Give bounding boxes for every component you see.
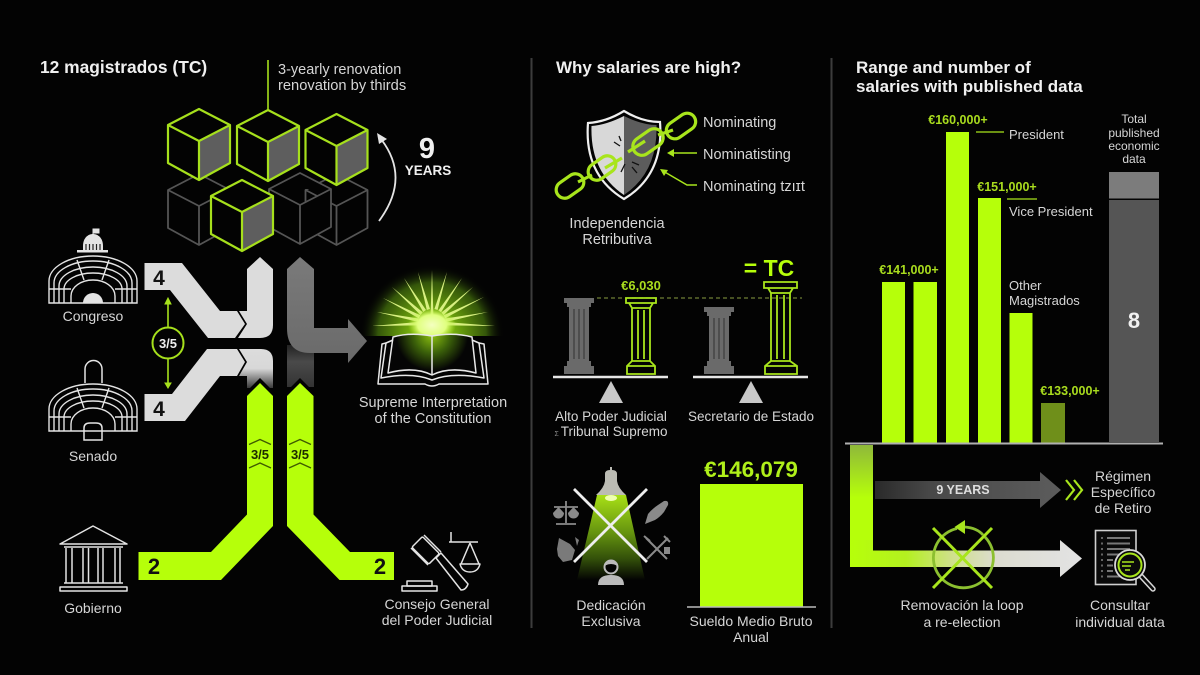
panel: composition of the court xyxy=(40,57,507,628)
label: Dedicacion Exclusiva: Exclusiva xyxy=(581,613,641,629)
values: salary labels: €141,000+ xyxy=(879,263,939,277)
label: Nominating list: Nominating tzıɪt xyxy=(703,179,805,195)
arrow: Gobierno green path: 3/5 xyxy=(251,447,269,462)
label: 6,030 euro: €6,030 xyxy=(621,278,661,293)
balance: Secretario de Estado xyxy=(693,282,808,403)
label: Congreso: Congreso xyxy=(63,308,124,324)
icon: Senado xyxy=(49,360,137,440)
label: Dedicacion Exclusiva xyxy=(576,597,646,629)
label: Senado: Senado xyxy=(69,448,117,464)
heading: 12 magistrados: 12 magistrados (TC) xyxy=(40,57,207,77)
label: Consejo General: Consejo General xyxy=(384,596,490,612)
label: Secretario de Estado: Secretario de Estado xyxy=(688,409,814,424)
label: Regimen Especifico de Retiro: de Retiro xyxy=(1095,500,1152,516)
arrow: Congreso white path: 4 xyxy=(153,267,165,290)
renovation callout: 3-yearly renovation xyxy=(278,62,401,78)
label: 9 years: YEARS xyxy=(405,163,451,178)
label: Consultar individual data: individual data xyxy=(1075,614,1165,630)
arrow: Senado white path xyxy=(144,349,273,421)
label: Total published economic data: economic xyxy=(1108,139,1160,153)
balance: Alto Poder Judicial xyxy=(553,298,668,403)
bar: total published: 8 xyxy=(1128,308,1140,333)
label: 9 years: 9 xyxy=(419,133,435,165)
arrow: Nominatisting pointer xyxy=(667,149,697,157)
arrow: Gobierno green path xyxy=(138,378,279,580)
arrow: green to white L xyxy=(850,445,1082,577)
label: Total published economic data: data xyxy=(1122,152,1146,166)
label: Regimen Especifico de Retiro: Régimen xyxy=(1095,468,1151,484)
arrow: Consejo green path: 3/5 xyxy=(291,447,309,462)
arrow: nine years xyxy=(875,472,1061,508)
icon: document and magnifier xyxy=(1096,530,1153,589)
label: 9 years xyxy=(405,133,451,178)
labels: roles: Other xyxy=(1009,278,1042,293)
label: Consejo General: del Poder Judicial xyxy=(382,612,492,628)
label: Consejo General xyxy=(382,596,492,628)
label: Gobierno: Gobierno xyxy=(64,600,122,616)
icon: crossed re-election loop xyxy=(933,520,993,588)
values: salary labels: €160,000+ xyxy=(928,113,988,127)
label: Sueldo Medio Bruto Anual: Anual xyxy=(733,629,769,645)
arrow: Nominating tzit pointer xyxy=(660,169,697,185)
value: 146,079 euro: €146,079 xyxy=(704,457,798,482)
values: salary labels: €151,000+ xyxy=(977,180,1037,194)
panel: range and number of salaries xyxy=(845,58,1165,630)
label: Supreme Interpretation xyxy=(359,395,507,427)
icon: gavel and scales xyxy=(402,532,480,591)
label: Independencia Retributiva: Independencia xyxy=(569,216,665,232)
label: Nominating list: Nominating xyxy=(703,115,776,131)
arrow: Gobierno green path: 2 xyxy=(148,554,160,579)
label: Nominating list xyxy=(703,115,805,195)
label: Supreme Interpretation: of the Constitution xyxy=(375,411,491,427)
label: Regimen Especifico de Retiro xyxy=(1091,468,1156,516)
bar: total published xyxy=(1109,172,1159,443)
labels: roles xyxy=(1009,127,1093,308)
label: Regimen Especifico de Retiro: Específico xyxy=(1091,484,1156,500)
bar: average gross salary xyxy=(687,484,816,607)
label: Total published economic data: published xyxy=(1108,126,1160,140)
arrow: nine years: 9 YEARS xyxy=(936,483,990,497)
panel: why salaries are high xyxy=(553,58,816,645)
labels: roles: President xyxy=(1009,127,1064,142)
heading: Range and number xyxy=(856,58,1083,96)
label: Total published economic data: Total xyxy=(1121,112,1147,126)
label: Dedicacion Exclusiva: Dedicación xyxy=(576,597,646,613)
bar chart: salaries xyxy=(845,132,1163,444)
icon: Gobierno xyxy=(60,526,127,591)
renovation callout: renovation by thirds xyxy=(278,78,406,94)
badge: 3/5 between chambers: 3/5 xyxy=(159,336,177,351)
label: Total published economic data xyxy=(1108,112,1160,166)
label: Sueldo Medio Bruto Anual: Sueldo Medio Bruto xyxy=(690,613,813,629)
icon: Congreso xyxy=(49,229,137,303)
badge: 3/5 between chambers xyxy=(152,298,184,388)
heading: Why salaries are high: Why salaries are high? xyxy=(556,58,741,77)
label: Alto Poder Judicial: Alto Poder Judicial xyxy=(555,409,667,424)
label: Nominating list: Nominatisting xyxy=(703,147,791,163)
heading: Range and number: Range and number of xyxy=(856,58,1031,77)
arrow: Senado white path: 4 xyxy=(153,398,165,421)
label: Supreme Interpretation: Supreme Interpretation xyxy=(359,395,507,411)
cube stack xyxy=(168,109,368,251)
arrow: Congreso white path xyxy=(144,257,273,338)
label: Consultar individual data: Consultar xyxy=(1090,597,1150,613)
arrow: nine year cycle xyxy=(377,133,396,221)
icon: glowing open book xyxy=(362,270,498,387)
labels: roles: Magistrados xyxy=(1009,293,1080,308)
label: Alto Poder Judicial: Σ Tribunal Supremo xyxy=(554,424,668,439)
label: Independencia Retributiva: Retributiva xyxy=(582,232,653,248)
labels: roles: Vice President xyxy=(1009,204,1093,219)
label: Removacion: a re-election xyxy=(923,614,1001,630)
heading: Range and number: salaries with published data xyxy=(856,77,1083,96)
label: equals TC: = TC xyxy=(744,255,794,281)
icon: double chevron xyxy=(1066,480,1082,500)
icon: exclusive dedication lamp xyxy=(553,467,670,585)
label: Removacion xyxy=(901,597,1024,630)
label: Consultar individual data xyxy=(1075,597,1165,630)
label: Removacion: Removación la loop xyxy=(901,597,1024,613)
label: Sueldo Medio Bruto Anual xyxy=(690,613,813,645)
values: salary labels xyxy=(879,113,1100,398)
arrow: output gray to constitution xyxy=(287,257,367,387)
label: Independencia Retributiva xyxy=(569,216,665,248)
label: Alto Poder Judicial xyxy=(554,409,668,439)
renovation callout xyxy=(268,60,406,111)
icon: shield with broken chain xyxy=(553,110,699,202)
arrow: Consejo green path: 2 xyxy=(374,554,386,579)
arrow: Consejo green path xyxy=(281,378,394,580)
values: salary labels: €133,000+ xyxy=(1040,384,1100,398)
